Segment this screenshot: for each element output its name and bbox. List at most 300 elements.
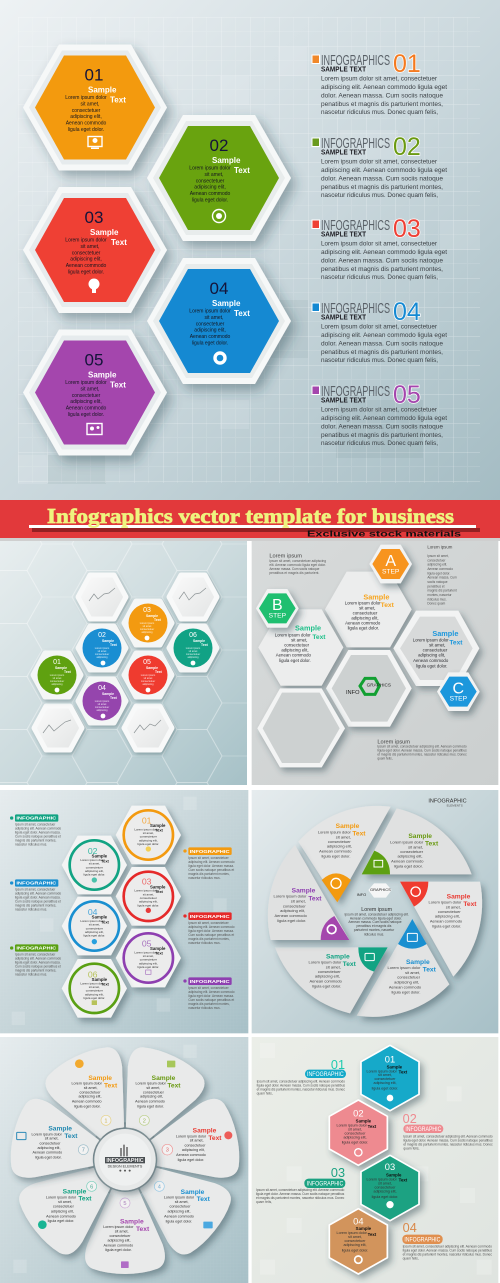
text block 05: 05 [393,381,421,409]
blade teal: consectetuer [318,969,341,974]
circle 04 purple [78,679,126,723]
hexagon 01 orange: Lorem ipsum dolor [65,95,107,101]
blade green: Lorem ipsum dolor [390,839,424,844]
circle 03 orange: Lorem ipsum [140,622,154,625]
centre circle logo: DESIGN ELEMENTS [108,1165,143,1169]
hexagon 01 orange: 01 [85,66,103,84]
hexagon ring 05: Text [155,951,164,956]
circle 05 red: Sample [146,666,158,670]
text block 04: Lorem ipsum dolor sit amet, consectetuer [321,324,438,331]
blade teal: Sample [326,953,350,960]
label left teal [10,814,61,847]
hexagon left sample: Sample [295,624,321,633]
hexagon 01 orange [23,44,167,170]
label 03 [256,1166,345,1204]
label left teal: Cum sociis natoque penatibus et [15,835,61,839]
hexagon 02 green: consectetuer [196,178,225,184]
hexagon top sample: Text [381,602,395,609]
label right orange: magnis dis parturient montes, [188,872,230,876]
blade orange [298,806,391,902]
hexagon 05 purple: Aenean commodo [66,406,107,412]
hexagon 02 pink: Text [368,1124,377,1129]
hexagon top sample: Sample [363,592,389,601]
petal 5 purple: Lorem ipsum dolor [103,1225,134,1229]
hexagon 04 blue: 04 [210,279,228,298]
label left green [10,944,61,977]
centre circle logo [94,1129,156,1190]
centre logo and text: ridiculus mus. [364,932,384,936]
label left blue: nascetur ridiculus mus. [15,908,47,912]
blade purple: ligula eget dolor. [277,918,306,923]
blade red: Sample [447,893,471,900]
label 01: INFOGRAPHIC [307,1072,344,1078]
hexagon left sample: sit amet, [291,638,308,643]
hexagon 01 orange: Text [110,96,126,104]
label right red: magnis dis parturient montes, [188,937,230,941]
circle 03 orange: sit amet [143,625,152,628]
hexagon 05 purple: adipiscing elit, [70,399,102,405]
circle 06 teal: Text [201,643,209,647]
hexagon 02 green [147,115,291,241]
label 02: ligula eget dolor. Aenean massa. Cum sociis natoque penatibus [403,1138,493,1142]
lorem ipsum top right: montes, nascetur [427,593,452,597]
petal 2 green: adipiscing elit, [140,1095,163,1099]
hexagon ring 04: ligula eget dolor. [83,934,105,938]
hexagon left sample: Lorem ipsum dolor [275,633,311,638]
label left blue: adipiscing elit. Aenean commodo [15,892,61,896]
label right purple: adipiscing elit. Aenean commodo [188,990,235,994]
blade orange: Lorem ipsum dolor [318,829,352,834]
hexagon ring 06: 06 [88,969,98,979]
hexagon ring 02: adipiscing elit, [85,869,104,873]
text block 03: Lorem ipsum dolor sit amet, consectetuer [321,241,438,248]
hexagon ring 02: 02 [88,846,98,856]
hexagon ring 01: Sample [150,823,166,828]
petal 7 blue: Text [64,1133,78,1140]
hexagon outline centre with logo: GRAPHICS [367,683,391,688]
circle 04 purple: Lorem ipsum [95,700,109,703]
icon: picture card [87,424,102,434]
label 01 [257,1058,346,1096]
petal 1 orange: consectetuer [80,1090,101,1094]
hexagon right sample: Aenean commodo [413,658,449,663]
petal 5 purple [86,1190,164,1273]
hexagon 02 pink: adipiscing elit, [344,1135,366,1139]
hexagon 01 orange: consectetuer [72,108,101,114]
petal 2 green: consectetuer [143,1090,165,1094]
hexagon ring 03: Sample [150,884,166,889]
petal 7 blue [6,1096,104,1191]
label 03: 03 [331,1166,345,1180]
label right purple: nascetur ridiculus mus. [188,1006,221,1010]
text block 04: nascetur ridiculus mus. Donec quam felis, [321,357,438,364]
hexagon 02 green: Sample [212,156,241,165]
title banner [0,500,500,541]
text block 03: adipiscing elit. Aenean commodo ligula eget [321,249,447,256]
circle 02 blue [78,626,126,670]
petal 7 blue: consectetuer [40,1141,61,1145]
hexagon 04 tan: adipiscing elit, [344,1243,366,1247]
label right red: Cum sociis natoque penatibus et [188,933,234,937]
hexagon right sample: ligula eget dolor. [416,663,447,668]
lorem ipsum top left: Ipsum sit amet, consectetuer adipiscing [269,559,326,563]
circle 03 orange: consectetuer [140,628,154,631]
hexagon 02 pink: sit amet, [348,1127,362,1131]
hexagon 02 pink: consectetuer [345,1131,366,1135]
hexagon outline centre with logo: INFO [346,690,360,696]
petal 3 red: Text [208,1135,222,1142]
hexagon 04 blue: Sample [212,299,241,308]
circle 06 teal: Lorem ipsum [186,647,200,650]
label 04: ligula eget dolor. Aenean massa. Cum sociis natoque penatibus [403,1249,492,1253]
label 01: quam felis, [257,1092,273,1096]
blade orange: sit amet, [336,834,351,839]
panel: steps A B C hexagons [252,541,498,785]
petal 7 blue: sit amet, [45,1137,59,1141]
lorem ipsum top left [269,553,326,575]
hexagon outline bottom left [257,688,345,767]
badge B step: B [272,597,283,614]
hexagon 01 cyan [361,1045,419,1111]
petal 6 teal: adipiscing elit, [51,1209,74,1213]
petal 4 blue: 4 [158,1184,161,1190]
hexagon 02 pink: ligula eget dolor. [342,1141,368,1145]
petal 7 blue: Aenean commodo [32,1151,62,1155]
text block 02: dolor. Aenean massa. Cum sociis natoque [321,176,443,182]
hexagon ring 06: Sample [92,977,108,982]
label left green: Cum sociis natoque penatibus et [15,965,61,969]
lorem ipsum top right: sociis natoque [427,580,448,584]
label right red: ligula eget dolor. Aenean massa. [188,929,234,933]
label 02: quam felis, [403,1146,420,1150]
text block 02: penatibus et magnis dis parturient montes, [321,184,443,191]
petal 5 purple: Aenean commodo [103,1243,133,1247]
blade orange: Sample [336,823,360,830]
label left teal: nascetur ridiculus mus. [15,843,47,847]
petal 6 teal: Sample [63,1189,87,1196]
hexagon 05 purple: 05 [85,350,103,370]
blade teal: ligula eget dolor. [312,984,341,989]
petal 2 green: Aenean commodo [135,1099,165,1103]
petal 5 purple: sit amet, [115,1229,129,1233]
hexagon 03 teal: 03 [385,1162,395,1172]
hexagon 04 blue: ligula eget dolor. [192,340,228,346]
petal 6 teal: Text [78,1196,92,1203]
hexagon 03 red [23,187,167,313]
label 04: Ipsum sit amet, consectetuer adipiscing elit. Aenean commodo [403,1245,492,1249]
text block 03: penatibus et magnis dis parturient montes, [321,266,443,273]
blade red: ligula eget dolor. [432,924,461,929]
blade purple: Aenean commodo [274,913,308,918]
label 02: INFOGRAPHIC [405,1127,442,1133]
petal 2 green: Sample [152,1075,176,1082]
blade blue: sit amet, [405,970,420,975]
hexagon right sample [393,611,479,686]
hexagon left sample: Text [312,634,326,641]
petal 2 green: ligula eget dolor. [137,1104,164,1108]
hexagon right sample: Sample [432,629,458,638]
petal 7 blue: adipiscing elit, [38,1146,60,1150]
circle 06 teal: consectetuer [186,653,200,656]
label 01: Ipsum sit amet, consectetuer adipiscing elit. Aenean commodo [257,1080,345,1084]
badge A step: A [385,553,396,570]
label 03: INFOGRAPHIC [307,1182,344,1188]
lorem ipsum bottom: ligula eget dolor. Aenean massa. Cum sociis natoque penatibus [377,749,467,753]
panel: five hexagon infographic [0,0,500,500]
petal 5 purple: consectetuer [110,1234,131,1238]
blade green: sit amet, [408,844,423,849]
hexagon top sample: Aenean commodo [345,620,381,625]
centre logo and text: GRAPHICS [370,887,391,892]
hexagon ring 03 [116,867,181,926]
text block 01 [312,50,447,116]
blank hexagon chart top left [78,575,126,619]
hexagon 01 orange: adipiscing elit, [70,114,102,120]
petal 7 blue: 7 [82,1148,85,1154]
text block 03: INFOGRAPHICS [321,218,390,234]
hexagon 02 green: Lorem ipsum dolor [189,166,231,172]
hexagon ring 05: ligula eget dolor. [137,965,159,969]
hexagon top sample: sit amet, [359,605,376,610]
petal 4 blue: sit amet, [175,1200,189,1204]
label right orange: Cum sociis natoque penatibus et [188,868,234,872]
label left blue [10,879,61,912]
hexagon ring 06: adipiscing elit, [85,992,104,996]
petal 1 orange: sit amet, [84,1086,98,1090]
hexagon ring 04: Sample [92,915,108,920]
text block 01: SAMPLE TEXT [321,67,367,74]
lorem ipsum top right: consectetuer [427,558,445,562]
hexagon ring 04: Text [101,919,110,924]
circle 02 blue: Lorem ipsum [95,647,109,650]
hexagon 01 cyan: consectetuer [375,1077,396,1081]
petal 6 teal: ligula eget dolor. [48,1219,74,1223]
lorem ipsum top right: penatibus et [427,584,445,588]
label left green: adipiscing elit. Aenean commodo [15,957,61,961]
label right orange: nascetur ridiculus mus. [188,876,221,880]
circle 02 blue: Sample [102,639,114,643]
text block 03: dolor. Aenean massa. Cum sociis natoque [321,258,443,264]
centre circle logo: INFOGRAPHIC [106,1158,144,1164]
icon: circle badge [212,210,226,222]
hexagon ring 05: Lorem ipsum dolor [134,950,159,954]
text block 04: INFOGRAPHICS [321,301,390,317]
petal 3 red: Aenean commodo [176,1153,206,1157]
petal 6 teal [12,1148,125,1261]
blade orange: consectetuer [328,839,351,844]
blade orange: Aenean commodo [319,848,352,853]
text block 02: adipiscing elit. Aenean commodo ligula eget [321,167,447,174]
hexagon ring 03: Lorem ipsum dolor [134,889,159,893]
hexagon ring 04: sit amet, [89,923,100,927]
blade blue: adipiscing elit, [394,979,419,984]
lorem ipsum top left: Lorem ipsum [269,553,302,559]
text block 02: SAMPLE TEXT [321,150,367,157]
petal 3 red: consectetuer [185,1143,206,1147]
petal 4 blue: consectetuer [170,1205,191,1209]
hexagon left sample: consectetuer [284,642,310,647]
text block 02: Lorem ipsum dolor sit amet, consectetuer [321,159,438,166]
hexagon 01 cyan: Lorem ipsum dolor [367,1069,398,1073]
circle 04 purple: sit amet [98,703,107,706]
centre logo and text: Aenean commodo ligula eget dolor. [350,916,402,920]
blade orange: adipiscing elit, [327,844,352,849]
text block 01: nascetur ridiculus mus. Donec quam felis, [321,109,438,116]
hexagon 02 green: Aenean commodo [190,191,231,197]
circle 02 blue: 02 [98,632,106,639]
header infographic elements: INFOGRAPHIC [428,799,467,805]
panel: seven petal flower [0,1037,248,1283]
label 02: Ipsum sit amet, consectetuer adipiscing elit. Aenean commodo [403,1134,493,1138]
text block 01: penatibus et magnis dis parturient montes, [321,101,443,108]
petal 4 blue [125,1148,238,1261]
hexagon ring 02: ligula eget dolor. [83,873,105,877]
hexagon 02 pink: Lorem ipsum dolor [337,1124,368,1128]
hexagon ring 01: consectetuer [140,835,157,839]
lorem ipsum top right: Aenean commodo [427,567,453,571]
hexagon 03 red: Aenean commodo [66,263,107,269]
panel: six ring hexagons [0,790,248,1033]
hexagon ring 06: ligula eget dolor. [83,996,105,1000]
hexagon 04 tan: consectetuer [345,1239,366,1243]
circle 05 red: Text [155,670,163,674]
hexagon ring 03: consectetuer [140,896,157,900]
petal 1 orange [41,1041,147,1149]
hexagon right sample: consectetuer [423,648,448,653]
label right purple [183,977,235,1010]
petal 1 orange: Sample [88,1075,112,1082]
hexagon ring 01: sit amet, [143,831,154,835]
text block 02: INFOGRAPHICS [321,136,390,152]
hexagon ring 04: adipiscing elit, [85,930,104,934]
centre logo and text: INFO [357,892,366,897]
hexagon 04 blue: Text [234,309,250,318]
hexagon left sample: ligula eget dolor. [279,658,311,663]
text block 03: SAMPLE TEXT [321,232,367,239]
hexagon top sample: adipiscing elit, [351,615,379,620]
badge A step [369,545,412,583]
hexagon right sample: adipiscing elit, [418,653,445,658]
label right orange: Ipsum sit amet, consectetuer [188,856,229,860]
circle 06 teal: sit amet [189,650,198,653]
blade red: Lorem ipsum dolor [428,899,462,904]
centre logo and text: Lorem ipsum [361,907,393,913]
hexagon ring 05: Sample [150,946,166,951]
text block 04: dolor. Aenean massa. Cum sociis natoque [321,340,443,348]
blade green: Sample [408,833,432,840]
blade green: ligula eget dolor. [394,863,423,868]
lorem ipsum top right: Donec quam [427,602,446,606]
hexagon 03 red: 03 [85,208,103,227]
hexagon top sample: consectetuer [353,610,378,615]
label right orange: ligula eget dolor. Aenean massa. [188,864,234,868]
hexagon right sample: Lorem ipsum dolor [413,638,449,643]
label left blue: magnis dis parturient montes, [15,904,57,908]
circle 01 green: adipiscing [51,683,63,686]
title banner: Exclusive stock materials [307,528,461,538]
circle 03 orange: Sample [146,614,158,618]
hexagon ring 03: adipiscing elit, [139,900,158,904]
petal 1 orange: ligula eget dolor. [74,1104,101,1108]
circle 06 teal: adipiscing [187,656,199,659]
petal 5 purple: Text [136,1226,150,1233]
circle 05 red: Lorem ipsum [141,674,155,677]
hexagon top sample: ligula eget dolor. [348,625,379,630]
hexagon 03 teal: Text [399,1178,408,1183]
blade teal: Text [343,961,357,968]
label right red: Ipsum sit amet, consectetuer [188,921,229,925]
text block 05: penatibus et magnis dis parturient montes, [321,432,443,439]
circle 04 purple: consectetuer [95,706,109,709]
hexagon ring 06: consectetuer [86,989,103,993]
hexagon 03 teal: Sample [386,1172,402,1177]
hexagon 01 cyan: adipiscing elit, [374,1081,396,1085]
text block 04: 04 [393,298,421,326]
hexagon 01 orange: sit amet, [81,102,99,108]
label left green: magnis dis parturient montes, [15,969,57,973]
blade purple: Lorem ipsum dolor [273,894,307,899]
circle 02 blue: Text [110,643,118,647]
petal 6 teal: consectetuer [53,1205,75,1209]
circle 01 green: consectetuer [50,680,64,683]
text block 04: adipiscing elit. Aenean commodo ligula eget [321,332,447,339]
hexagon ring 04: consectetuer [86,926,103,930]
hexagon 01 cyan: Sample [387,1064,403,1069]
circle 01 green: 01 [53,659,61,666]
blade red: Aenean commodo [430,919,463,924]
hexagon ring 02: Sample [92,854,108,859]
text block 01: 01 [393,50,421,78]
blank hexagon chart bottom right [124,706,172,750]
label left blue: INFOGRAPHIC [16,881,57,887]
hexagon ring 02: sit amet, [89,862,100,866]
lorem ipsum bottom: Ipsum sit amet, consectetuer adipiscing elit. Aenean commodo [377,745,467,749]
hexagon ring 05: adipiscing elit, [139,961,158,965]
badge C step: C [453,680,464,697]
petal 1 orange: Aenean commodo [72,1099,102,1103]
circle 03 orange [124,601,172,645]
hexagon ring 04 [62,897,127,955]
blade blue: Sample [406,959,430,966]
hexagon 04 blue: adipiscing elit, [194,328,226,334]
circle 01 green: Sample [55,666,67,670]
label left teal: magnis dis parturient montes, [15,839,57,843]
hexagon ring 01: Text [155,828,164,833]
hexagon 03 teal: adipiscing elit, [374,1190,396,1194]
title banner: Infographics vector template for business [47,504,454,528]
icon: light bulb [88,278,100,293]
petal 5 purple: adipiscing elit, [108,1239,130,1243]
label right purple: INFOGRAPHIC [190,979,230,985]
badge A step: STEP [382,569,400,576]
petal 4 blue: Sample [181,1189,205,1196]
circle 04 purple: Sample [102,692,114,696]
petal 3 red: adipiscing elit, [182,1148,205,1152]
petal 2 green: Text [167,1082,181,1089]
lorem ipsum top right: Ipsum sit amet, [427,554,449,558]
petal 3 red: sit amet, [190,1139,204,1143]
petal 4 blue: Lorem ipsum dolor [164,1196,195,1200]
label left green: ligula eget dolor. Aenean massa. [15,961,61,965]
text block 03 [312,215,447,281]
text block 03: nascetur ridiculus mus. Donec quam felis, [321,274,438,281]
hexagon 04 tan [329,1209,387,1274]
circle 03 orange: adipiscing [141,631,153,634]
hexagon ring 04: Lorem ipsum dolor [80,919,105,923]
label 02: 02 [403,1112,417,1126]
circle 01 green: Text [64,670,72,674]
blade red: consectetuer [438,909,461,914]
